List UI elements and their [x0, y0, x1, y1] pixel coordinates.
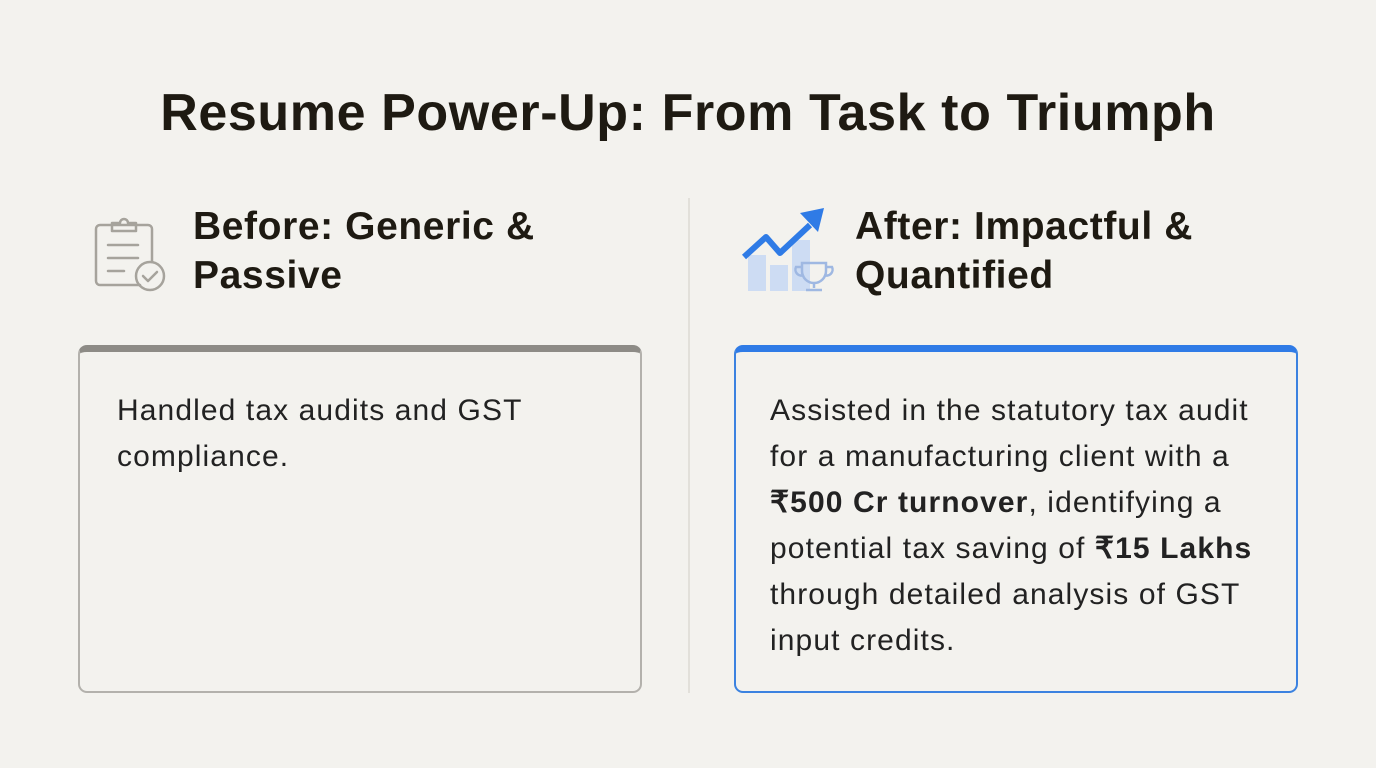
text: after: potential tax saving of ₹15 Lakhs — [770, 532, 1252, 565]
title: Resume Power-Up: From Task to Triumph — [160, 84, 1216, 142]
icon: growth chart with trophy — [742, 208, 834, 292]
heading: after: Quantified — [855, 254, 1054, 297]
text: after: input credits. — [770, 624, 955, 657]
text: after: Assisted in the statutory tax audit — [770, 394, 1249, 427]
text: before: Handled tax audits and GST — [117, 394, 522, 427]
icon: clipboard — [94, 218, 166, 292]
panel: after — [734, 345, 1298, 693]
text: after: through detailed analysis of GST — [770, 578, 1240, 611]
text: after — [770, 394, 1252, 657]
text: before: compliance. — [117, 440, 289, 473]
heading: after: After: Impactful & — [855, 205, 1193, 248]
heading: before: Passive — [193, 254, 342, 297]
text: after: for a manufacturing client with a — [770, 440, 1230, 473]
heading: after — [855, 205, 1193, 297]
text: before — [117, 394, 522, 473]
heading: before — [193, 205, 535, 297]
text: after: ₹500 Cr turnover, identifying a — [770, 486, 1222, 519]
panel: before — [78, 345, 642, 693]
divider — [688, 198, 690, 693]
heading: before: Before: Generic & — [193, 205, 535, 248]
